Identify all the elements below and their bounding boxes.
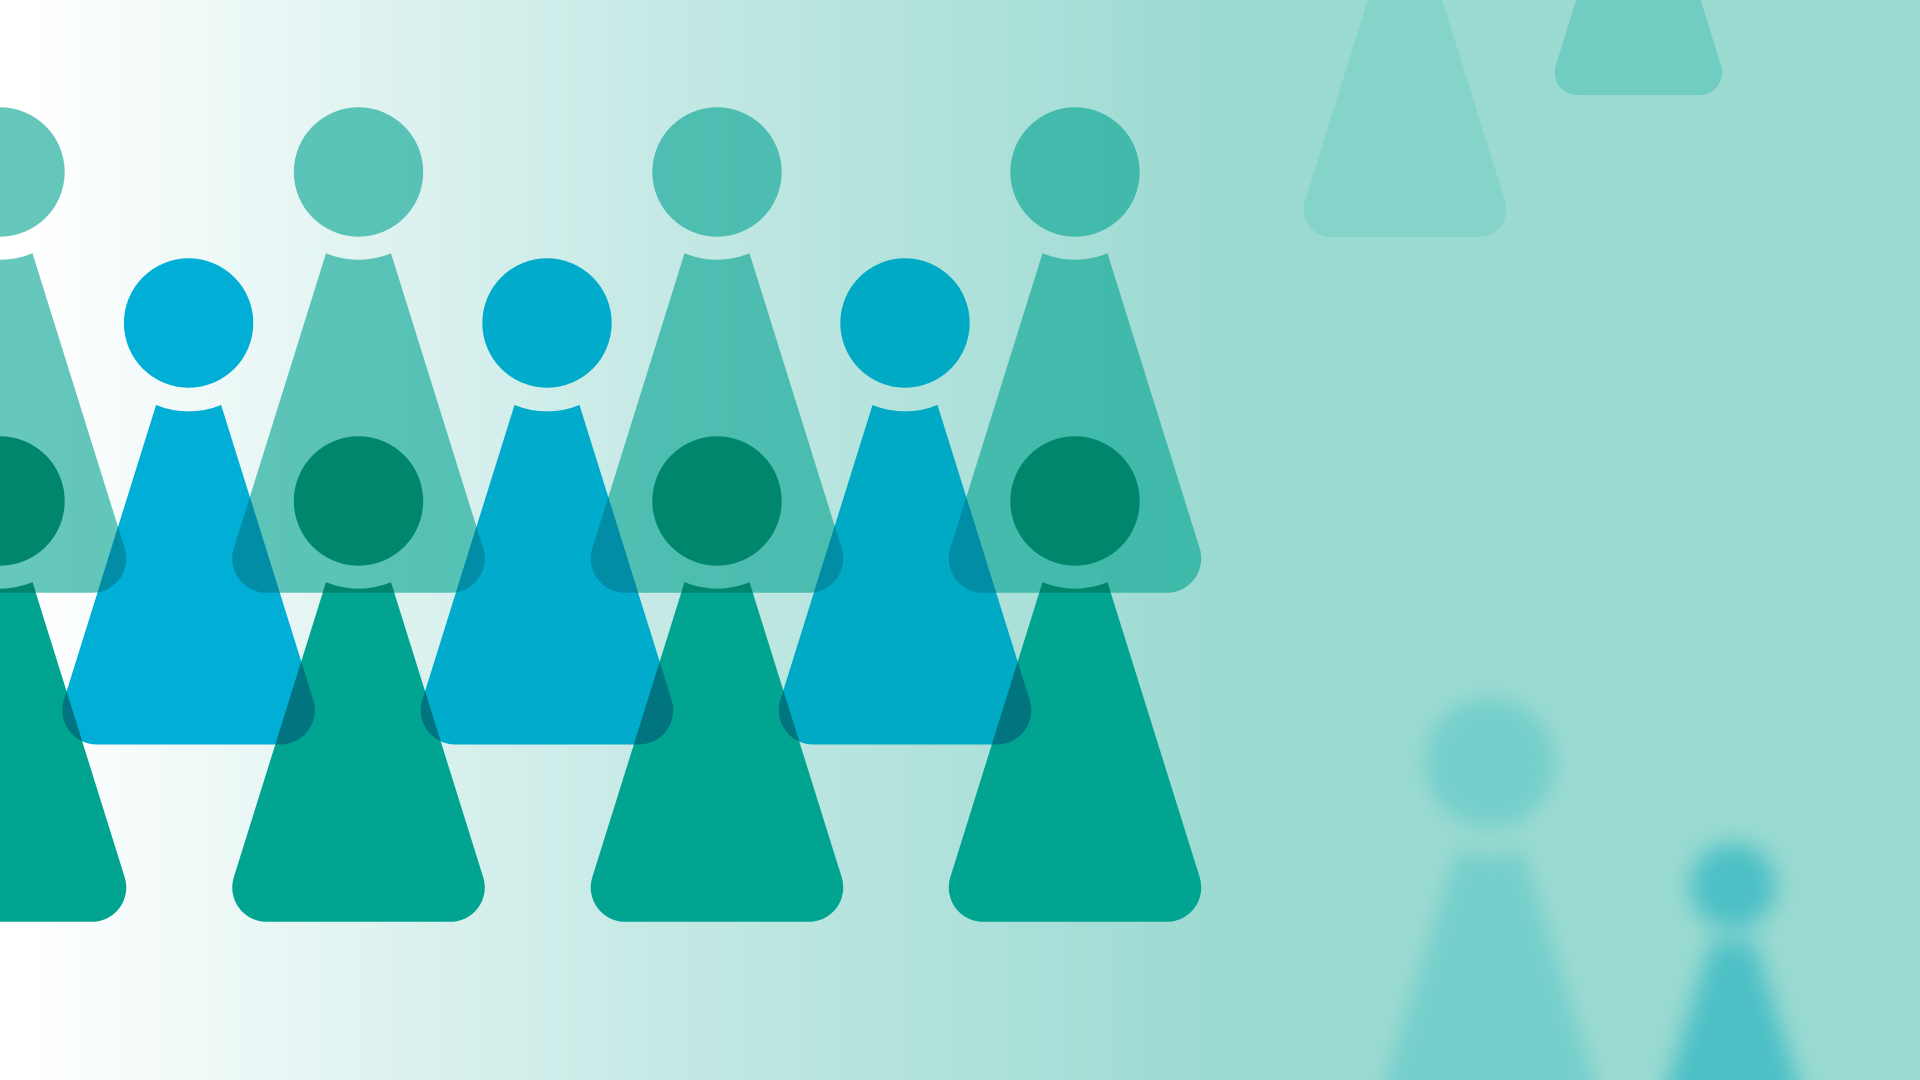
blurred figure: bottom right small — [1655, 843, 1811, 1080]
back figure 1 — [0, 107, 126, 593]
front figure 1 — [0, 436, 126, 922]
front figure 4 — [949, 436, 1201, 922]
front figure 2 — [232, 436, 485, 922]
faded figure: top right small — [1555, 0, 1722, 95]
front row of green figures — [0, 436, 1201, 922]
back figure 2 — [232, 107, 485, 593]
faded figure: top right large — [1304, 0, 1506, 237]
overlap: blue over back row — [98, 496, 996, 593]
back figure 3 — [591, 107, 843, 593]
blurred figure: bottom right large — [1364, 698, 1616, 1080]
blue figure 2 — [421, 258, 673, 744]
front figure 3 — [591, 436, 843, 922]
blue figure 1 — [62, 258, 315, 744]
back figure 4 — [949, 107, 1201, 593]
back row of light green figures — [0, 107, 1201, 593]
overlap: front bodies over blue bodies — [62, 661, 1032, 744]
blue figure 3 — [779, 258, 1031, 744]
overlap: front bodies over back bodies — [0, 582, 1111, 593]
middle row of blue figures — [62, 258, 1031, 744]
